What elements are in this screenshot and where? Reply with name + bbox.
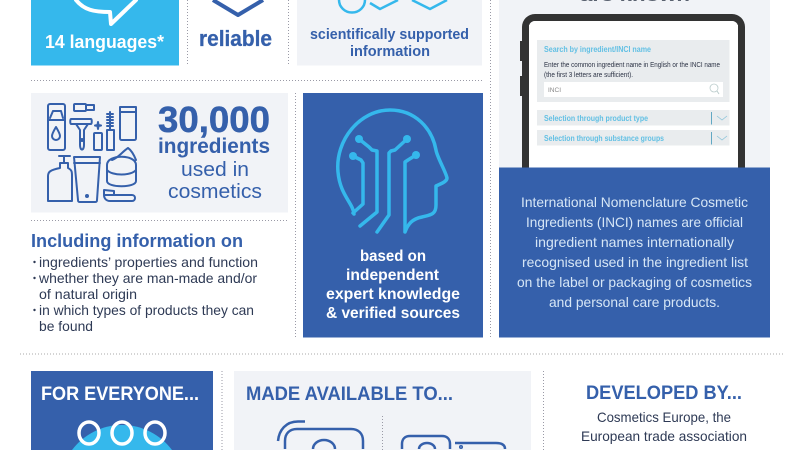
definition text: and personal care products. — [549, 294, 720, 310]
big number: 30,000 — [158, 99, 270, 140]
icon: head with circuits — [338, 110, 447, 232]
bullet list: in which types of products they can — [39, 302, 254, 318]
icon: people — [72, 422, 172, 450]
panel: for everyone — [31, 371, 213, 450]
bullet list: ingredients’ properties and function — [39, 254, 258, 270]
search form: (the first 3 letters are sufficient). — [544, 72, 633, 79]
panel: reliable — [199, 0, 272, 51]
expert knowledge text: independent — [346, 267, 440, 284]
panel: made available to — [234, 371, 531, 450]
search form — [537, 40, 730, 102]
search form: Enter the common ingredient name in English or the INCI name — [544, 62, 720, 69]
panel: INCI definition — [499, 168, 770, 338]
search form: Search by ingredient/INCI name — [544, 45, 651, 54]
expert knowledge text: & verified sources — [326, 305, 460, 322]
developer text: European trade association — [581, 428, 747, 444]
languages label: 14 languages* — [45, 32, 164, 52]
definition text: on the label or packaging of cosmetics — [517, 274, 752, 290]
selection: substance groups — [537, 130, 730, 146]
panel: 14 languages — [31, 0, 179, 66]
developer text — [581, 409, 747, 444]
selection: substance groups: Selection through substance groups — [544, 134, 664, 143]
bullet list: whether they are man-made and/or — [38, 270, 257, 286]
definition text: Ingredients (INCI) names are official — [526, 214, 743, 230]
icon: consumer profile — [278, 422, 363, 449]
selection: product type: Selection through product type — [544, 114, 648, 123]
definition text: International Nomenclature Cosmetic — [521, 194, 748, 210]
ingredients word: ingredients — [158, 135, 270, 158]
heading: FOR EVERYONE... — [41, 383, 199, 405]
heading: including information on: Including information on — [31, 230, 243, 251]
icon: molecules — [339, 0, 447, 12]
bullet list: of natural origin — [39, 286, 137, 302]
panel: INCI search — [499, 0, 770, 170]
bullet list — [33, 254, 258, 334]
panel: 30,000 ingredients — [31, 93, 288, 212]
definition text — [517, 194, 752, 310]
expert knowledge text: expert knowledge — [326, 286, 460, 303]
expert knowledge text — [326, 248, 460, 322]
search form: INCI — [548, 87, 561, 94]
tablet — [520, 14, 745, 170]
used in cosmetics: cosmetics — [168, 180, 262, 203]
developer text: Cosmetics Europe, the — [597, 409, 731, 425]
icon: shield — [213, 0, 263, 15]
definition text: ingredient names internationally — [535, 234, 734, 250]
reliable label: reliable — [199, 26, 272, 51]
bullet list: be found — [39, 318, 93, 334]
supported label: information — [350, 44, 430, 60]
panel: scientifically supported information — [297, 0, 482, 66]
heading: MADE AVAILABLE TO... — [246, 383, 453, 405]
heading: DEVELOPED BY... — [586, 382, 742, 404]
selection: product type — [537, 110, 730, 126]
icon: professional profile — [402, 436, 505, 449]
used in cosmetics: used in — [181, 158, 249, 181]
definition text: recognised used in the ingredient list — [522, 254, 748, 270]
expert knowledge text: based on — [360, 248, 426, 265]
panel: developed by — [581, 382, 747, 444]
icon: speech bubble — [76, 0, 136, 24]
panel: independent expert knowledge — [303, 93, 483, 338]
supported label: scientifically supported — [310, 27, 469, 43]
icon: cosmetics products — [48, 104, 136, 202]
